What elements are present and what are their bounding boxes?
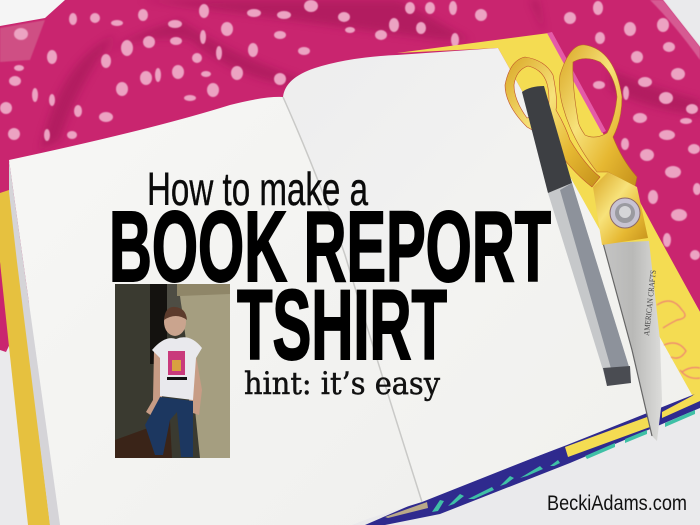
girl's arms: [146, 350, 202, 420]
scarf dots: [0, 0, 700, 260]
top left white corner: [0, 0, 65, 26]
right handle: [559, 45, 637, 187]
blade: [603, 241, 662, 441]
t-shirt print: [168, 351, 185, 375]
scissors: [505, 45, 662, 441]
yellow page illustrations: [657, 301, 700, 378]
subtitle: hint: hint: it’s easy: [244, 366, 440, 402]
book cover: yellow endpaper top and right: [397, 33, 700, 395]
left handle: [505, 57, 600, 187]
blade dark edge: [603, 243, 652, 436]
brand text: AMERICAN CRAFTS: [642, 270, 658, 336]
scarf: pink polka dot fabric: [0, 0, 700, 352]
pen: [522, 86, 631, 386]
book cover: pink edge strip: [547, 32, 606, 133]
girl's t-shirt: [152, 337, 202, 400]
left page: [9, 97, 422, 525]
pivot screw: [610, 198, 640, 228]
yellow bottom strip: [565, 390, 700, 457]
pink sliver on left: [0, 262, 6, 352]
title: TSHIRT: TSHIRT: [237, 269, 447, 380]
girl's head: [164, 308, 186, 336]
spine shadow: [283, 97, 422, 502]
girl's jeans: [145, 397, 193, 457]
spine tail: [385, 502, 428, 518]
pivot block: [593, 172, 648, 245]
book edge: blue and teal cover: [365, 392, 700, 525]
right page: [283, 48, 692, 502]
left page edge shadow: [9, 160, 60, 525]
title: How to make a: How to make a: [147, 163, 368, 215]
photo: girl in t-shirt: [115, 284, 230, 458]
left yellow cover strip: [0, 190, 50, 525]
